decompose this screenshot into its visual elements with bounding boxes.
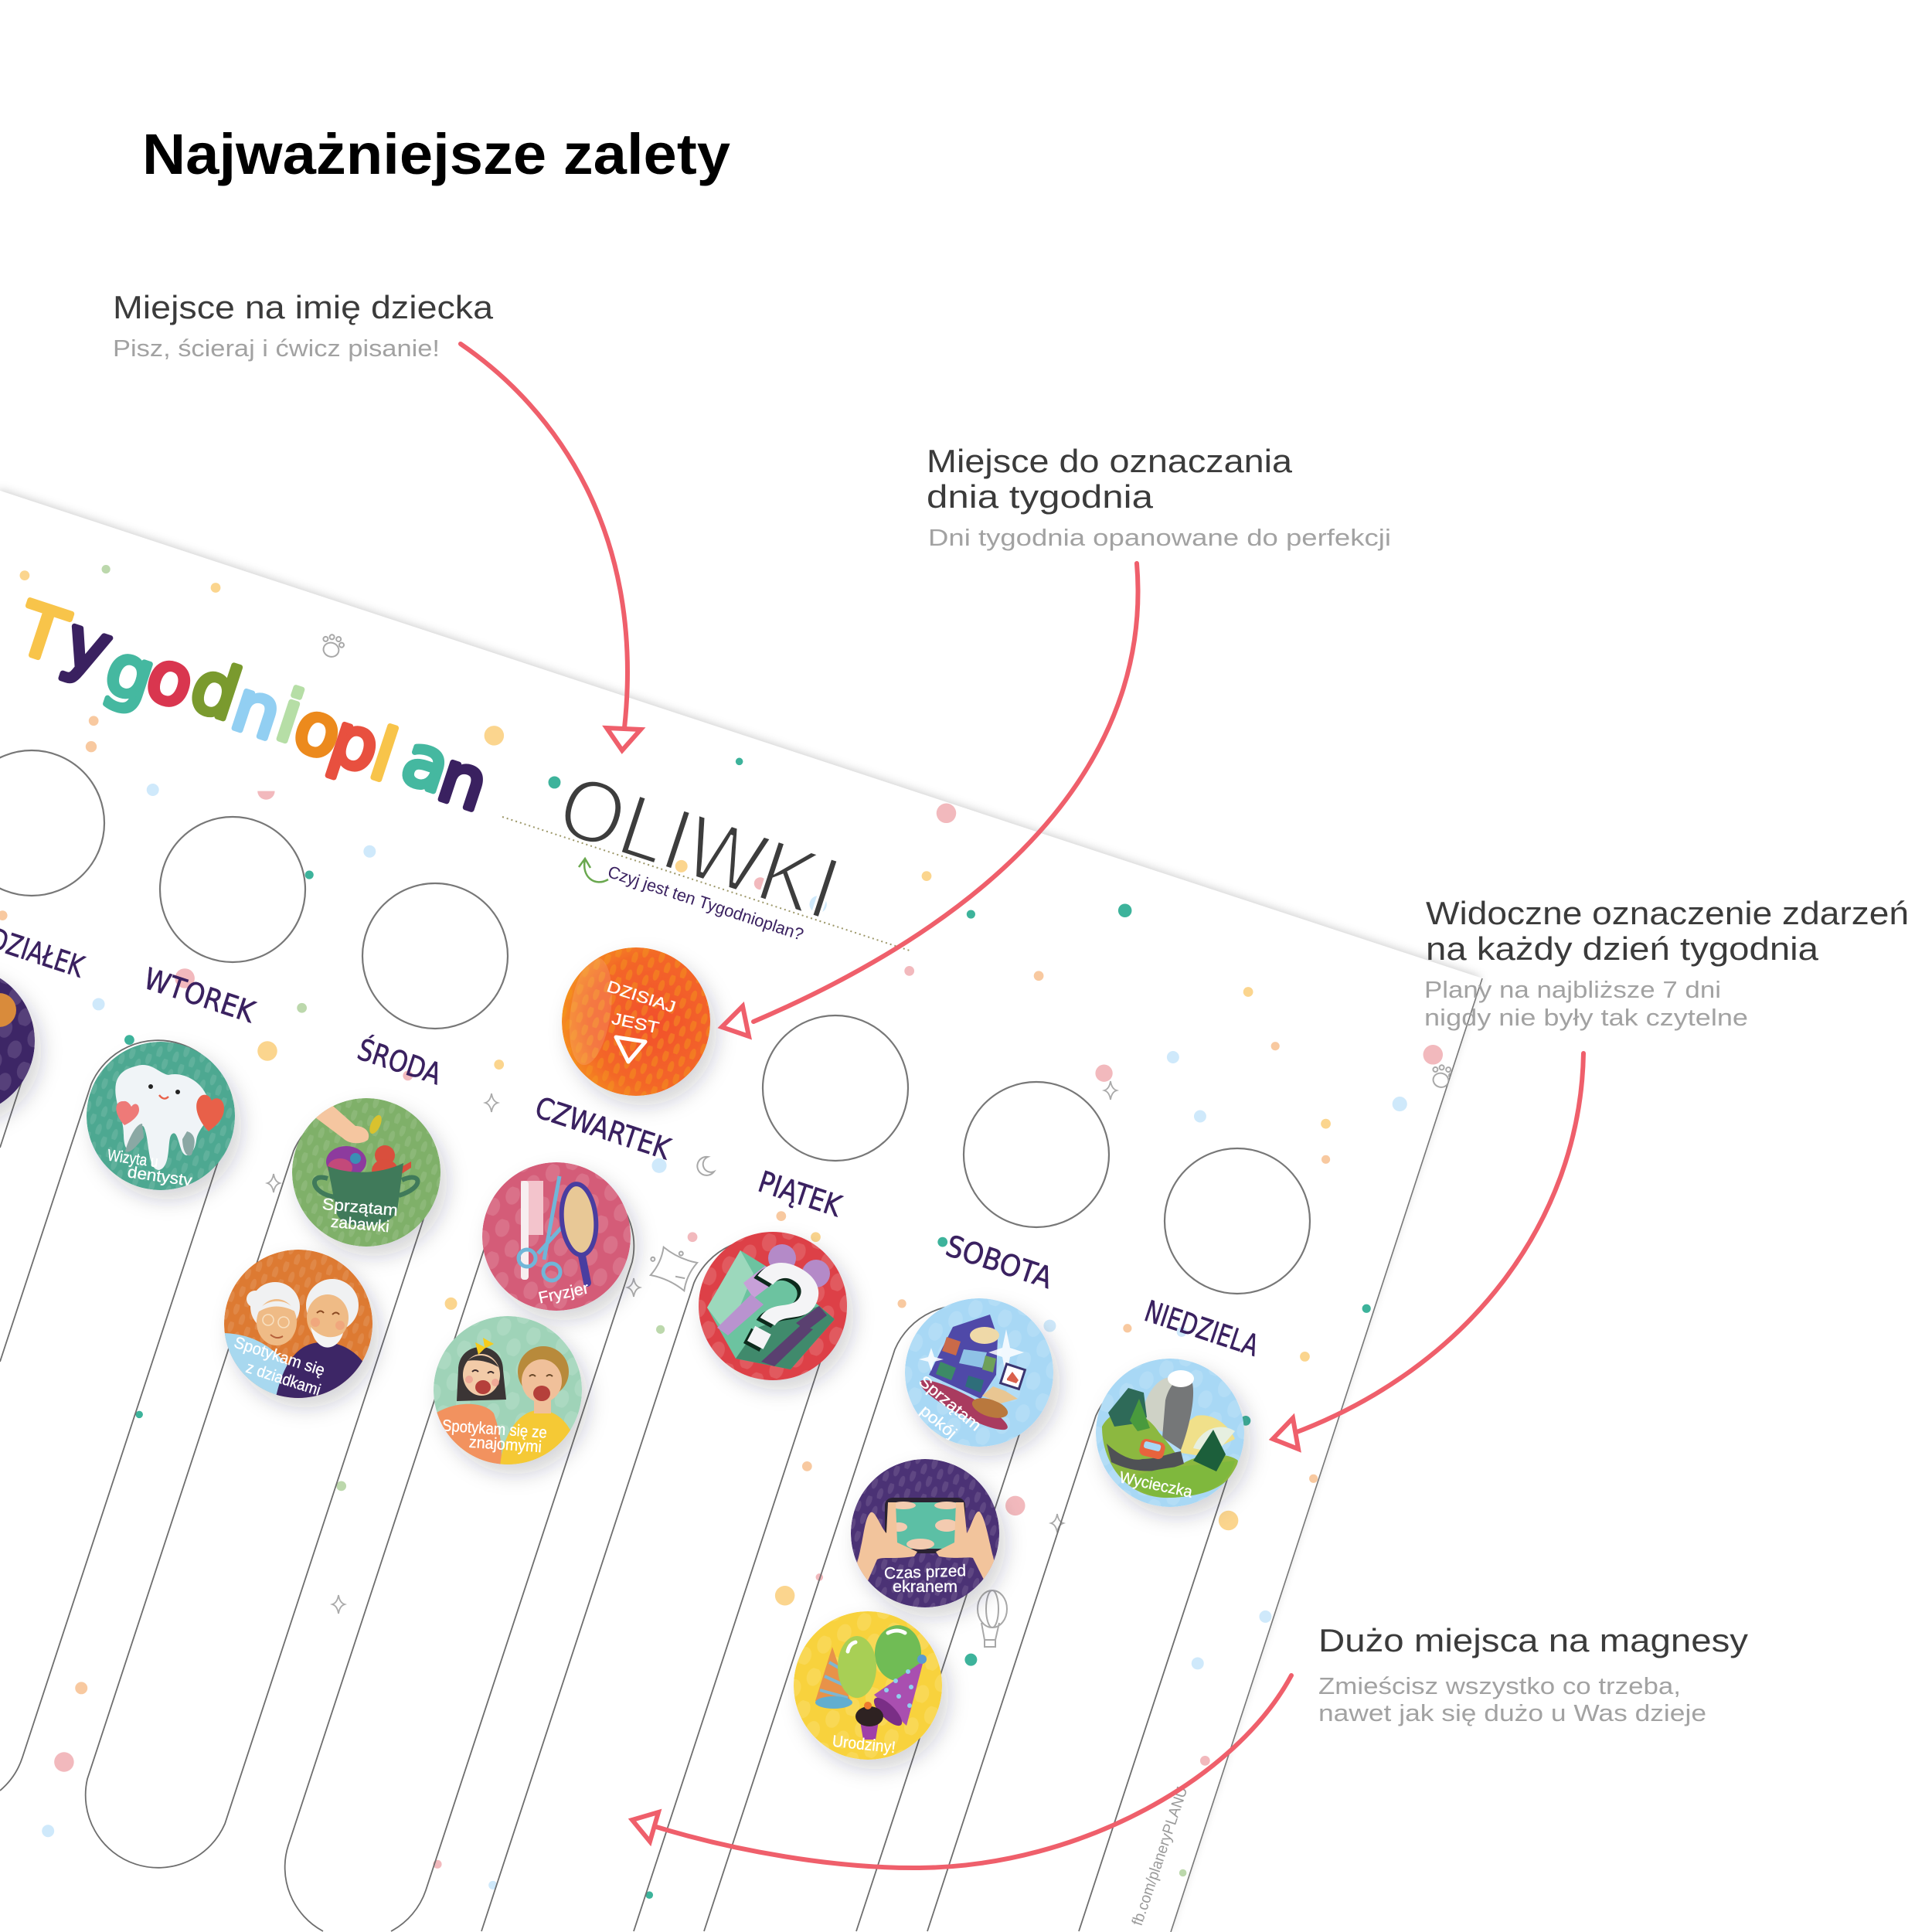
- callout: events: na każdy dzień tygodnia: [1426, 930, 1819, 967]
- sun: [1181, 1415, 1235, 1456]
- badge: Urodziny: [794, 1611, 942, 1760]
- poster title: Tygodnioplan: a: [393, 717, 460, 809]
- track: Saturday: [704, 1305, 1034, 1931]
- track: Monday: [0, 1063, 28, 1148]
- callout: day of week: Miejsce do oznaczania: [927, 443, 1293, 479]
- track: Friday: [481, 1239, 833, 1931]
- tablet: [885, 1498, 965, 1553]
- callout: events: nigdy nie były tak czytelne: [1424, 1004, 1748, 1031]
- bow: [768, 1244, 796, 1272]
- day labels: [0, 900, 1263, 1363]
- day labels: ŚRODA: [353, 1032, 446, 1091]
- badge: Fryzjer: [482, 1162, 631, 1311]
- car: [1138, 1437, 1166, 1461]
- question mark: ?: [706, 1229, 842, 1391]
- badge: Spotykam się ze znajomymi: Spotykam się ze: [441, 1417, 548, 1442]
- poster title: Tygodnioplan: o: [137, 633, 204, 725]
- callout: name: [113, 289, 494, 362]
- brush: [581, 1252, 587, 1283]
- badge: Spotykam się ze znajomymi: znajomymi: [468, 1434, 543, 1456]
- arrow: name field: [461, 344, 641, 750]
- icon: paw: [322, 634, 345, 658]
- callout: day of week: dnia tygodnia: [927, 478, 1154, 515]
- arrow: magnets: [632, 1675, 1291, 1868]
- doodles: paws, sparkles, pillow, moon, balloon: [267, 632, 1456, 1647]
- poster title: Tygodnioplan: l: [362, 713, 406, 798]
- track: Tuesday: [0, 1040, 230, 1791]
- poster title: Tygodnioplan: o: [284, 684, 352, 776]
- callout: name: Miejsce na imię dziecka: [113, 289, 494, 325]
- track: Thursday: [285, 1173, 634, 1931]
- rug: [915, 1372, 1012, 1437]
- cupcake: [860, 1721, 879, 1740]
- poster title: Tygodnioplan: n: [429, 735, 498, 828]
- track: Sunday: [927, 1372, 1235, 1931]
- poster title: Tygodnioplan: n: [223, 664, 291, 757]
- callout: events: [1424, 895, 1909, 1031]
- confetti dots: [0, 565, 1443, 1899]
- icon: hot air balloon: [978, 1590, 1007, 1647]
- callout: events: Plany na najbliższe 7 dni: [1424, 976, 1721, 1003]
- hand: [315, 1106, 369, 1144]
- badge: Czas przed ekranem: ekranem: [893, 1578, 957, 1596]
- day tracks: [0, 1040, 1235, 1931]
- day circles: [0, 750, 1310, 1294]
- toys: [326, 1146, 366, 1172]
- panel: poster sheet: [0, 491, 1482, 1932]
- badge: Czas przed ekranem: Czas przed: [884, 1562, 966, 1583]
- rocking toy: [970, 1394, 1010, 1422]
- badge: purple (Monday): [0, 967, 35, 1115]
- callout: name: Pisz, ścieraj i ćwicz pisanie!: [113, 335, 440, 362]
- callout: day of week: [927, 443, 1391, 551]
- badge: Spotykam się z dziadkami: [221, 1250, 372, 1401]
- callout: magnets: Dużo miejsca na magnesy: [1318, 1622, 1748, 1658]
- poster title: Tygodnioplan: y: [55, 600, 121, 692]
- track: Wednesday: [86, 1107, 433, 1868]
- mountains: [1141, 1377, 1179, 1434]
- tooth: [115, 1065, 209, 1170]
- icon: pillow: [649, 1246, 699, 1292]
- badge: Spotykam się z dziadkami: Spotykam się: [232, 1334, 327, 1379]
- day labels: CZWARTEK: [531, 1090, 675, 1166]
- day labels: SOBOTA: [942, 1229, 1056, 1295]
- girl: [457, 1347, 506, 1401]
- callout: day of week: Dni tygodnia opanowane do perfekcji: [928, 524, 1391, 551]
- badge: Fryzjer: Fryzjer: [537, 1279, 590, 1308]
- callout: magnets: Zmieścisz wszystko co trzeba,: [1318, 1672, 1681, 1699]
- poster title: Tygodnioplan: g: [96, 627, 165, 719]
- icon: moon: [697, 1157, 714, 1175]
- arrow: events: [1273, 1053, 1583, 1449]
- name field: OLIWKI: [502, 756, 912, 951]
- badge: Wizyta u dentysty: Wizyta u: [107, 1147, 159, 1171]
- badge: Czas przed ekranem: [851, 1459, 999, 1607]
- badge: Sprzątam pokój: pokój: [917, 1402, 960, 1442]
- balloons: [875, 1625, 921, 1681]
- dotted line: [502, 817, 912, 951]
- party hat left: [815, 1647, 851, 1702]
- poster title: Tygodnioplan: i: [267, 675, 312, 759]
- comb: [521, 1181, 543, 1235]
- badge: Urodziny: Urodziny!: [832, 1733, 896, 1757]
- poster title: Tygodnioplan: [8, 587, 498, 828]
- callout: magnets: nawet jak się dużo u Was dzieje: [1318, 1699, 1706, 1726]
- poster title: Tygodnioplan: T: [8, 587, 77, 679]
- badge: Spotykam się z dziadkami: z dziadkami: [243, 1359, 323, 1400]
- green hills: [1102, 1411, 1238, 1498]
- shelf: [929, 1315, 998, 1399]
- boy: [518, 1346, 569, 1397]
- badge: Sprzątam zabawki: [292, 1098, 440, 1247]
- badge: Wizyta u dentysty: [87, 1042, 235, 1190]
- caption: Czyj jest ten Tygodnioplan?: [605, 862, 806, 944]
- badge: Sprzątam zabawki: Sprzątam: [321, 1196, 399, 1219]
- badge: Sprzątam zabawki: zabawki: [330, 1213, 390, 1236]
- poster title: Tygodnioplan: d: [181, 645, 250, 736]
- icon: sparkles: [267, 1081, 1117, 1614]
- badge: Wizyta u dentysty: dentysty: [127, 1163, 194, 1190]
- callout: magnets: [1318, 1622, 1748, 1726]
- badge: Sprzątam pokój: Sprzątam: [915, 1372, 985, 1434]
- party hat right: [874, 1661, 923, 1726]
- day labels: WTOREK: [140, 961, 260, 1029]
- hands: [854, 1502, 917, 1584]
- name text: OLIWKI: [547, 756, 851, 939]
- sparkles: [988, 1329, 1024, 1377]
- picture frame: [1001, 1364, 1025, 1389]
- cup: [328, 1163, 403, 1226]
- arrow: today marker: [722, 563, 1138, 1036]
- badge: Dzisiaj jest: JEST: [610, 1010, 661, 1037]
- icon: green arrow: [579, 859, 608, 882]
- trees: [1108, 1388, 1147, 1427]
- day labels: NIEDZIELA: [1141, 1294, 1263, 1363]
- badge: Dzisiaj jest: [562, 947, 710, 1096]
- badge: Sprzątam pokój: [905, 1298, 1053, 1447]
- gift box: [707, 1250, 835, 1369]
- badge: Spotykam się ze znajomymi: [430, 1316, 582, 1468]
- badge: Dzisiaj jest: DZISIAJ: [604, 978, 678, 1016]
- icon: paw right: [1432, 1064, 1451, 1088]
- badge: question mark gift: ?: [710, 1226, 846, 1389]
- badge: Wycieczka: Wycieczka: [1117, 1468, 1194, 1502]
- scissors: [538, 1176, 586, 1260]
- day labels: PIĄTEK: [754, 1165, 846, 1223]
- footer url: fb.com/planeryPLANU: [1129, 1784, 1191, 1928]
- poster title: Tygodnioplan: p: [321, 697, 389, 790]
- badge: Wycieczka: [1096, 1359, 1244, 1507]
- callout: events: Widoczne oznaczenie zdarzeń: [1426, 895, 1909, 931]
- heading: Najważniejsze zalety: [142, 122, 730, 186]
